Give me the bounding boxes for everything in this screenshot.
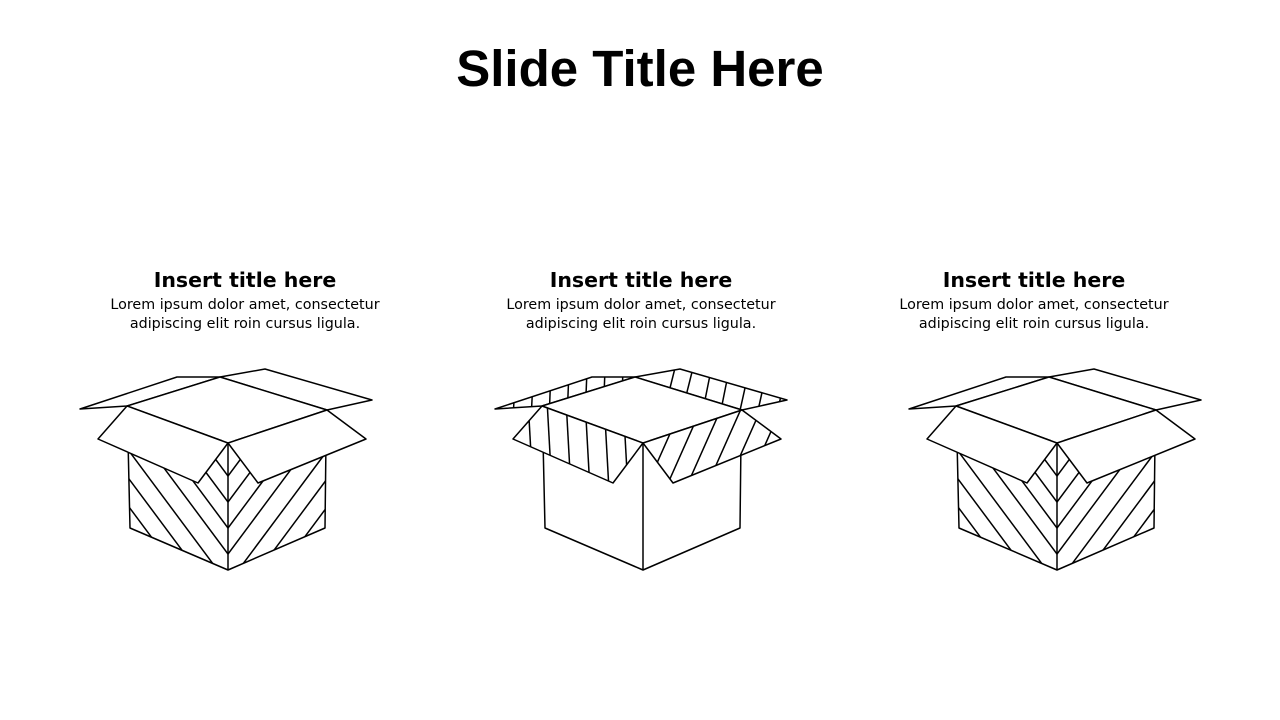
text block 1 xyxy=(110,268,380,332)
text block 3 xyxy=(899,268,1169,332)
text block 2: Insert title here xyxy=(550,268,732,292)
text block 2 xyxy=(506,268,776,332)
text block 2: adipiscing elit roin cursus ligula. xyxy=(526,316,756,332)
text block 1: Lorem ipsum dolor amet, consectetur xyxy=(110,297,380,313)
text block 1: Insert title here xyxy=(154,268,336,292)
box 1 xyxy=(80,304,372,668)
text block 2: Lorem ipsum dolor amet, consectetur xyxy=(506,297,776,313)
box 3 xyxy=(909,304,1201,668)
text block 3: Insert title here xyxy=(943,268,1125,292)
text block 1: adipiscing elit roin cursus ligula. xyxy=(130,316,360,332)
text block 3: Lorem ipsum dolor amet, consectetur xyxy=(899,297,1169,313)
box 2 xyxy=(495,360,805,570)
text block 3: adipiscing elit roin cursus ligula. xyxy=(919,316,1149,332)
title: Slide Title Here xyxy=(456,40,824,97)
